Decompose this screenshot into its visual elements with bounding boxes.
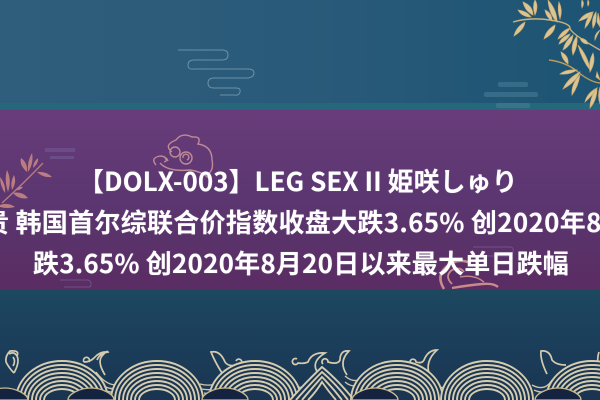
wave crests bbox=[6, 350, 600, 376]
icon: gold bamboo branches bbox=[513, 0, 600, 108]
wave: left bbox=[16, 361, 108, 400]
sea waves bbox=[0, 350, 600, 400]
faint outline clouds on banner bbox=[45, 148, 513, 287]
wave: far right bbox=[546, 361, 600, 400]
icon: pink cloud bottom bbox=[440, 261, 498, 289]
title line: 【DOLX-003】LEG SEX II 姫咲しゅり bbox=[78, 162, 518, 199]
bottom navy background bbox=[0, 289, 600, 400]
wave: peak bbox=[290, 367, 354, 400]
wave: large left bbox=[111, 361, 203, 400]
wave: center-left bbox=[209, 361, 301, 400]
wave: large right bbox=[441, 361, 533, 400]
flowing lines between waves bbox=[92, 372, 556, 396]
top teal background bbox=[0, 0, 600, 110]
icon: pink cloud center bbox=[154, 135, 212, 182]
faint cloud line top left bbox=[178, 50, 254, 95]
scrolling subtitle line 3: 跌3.65% 创2020年8月20日以来最大单日跌幅 bbox=[33, 244, 569, 281]
wave: center right bbox=[351, 361, 443, 400]
icon: pink bamboo branch left bbox=[0, 153, 52, 208]
small foreground waves bbox=[0, 388, 581, 400]
purple banner bbox=[0, 110, 600, 289]
faint cloud bars top right bbox=[484, 82, 538, 108]
